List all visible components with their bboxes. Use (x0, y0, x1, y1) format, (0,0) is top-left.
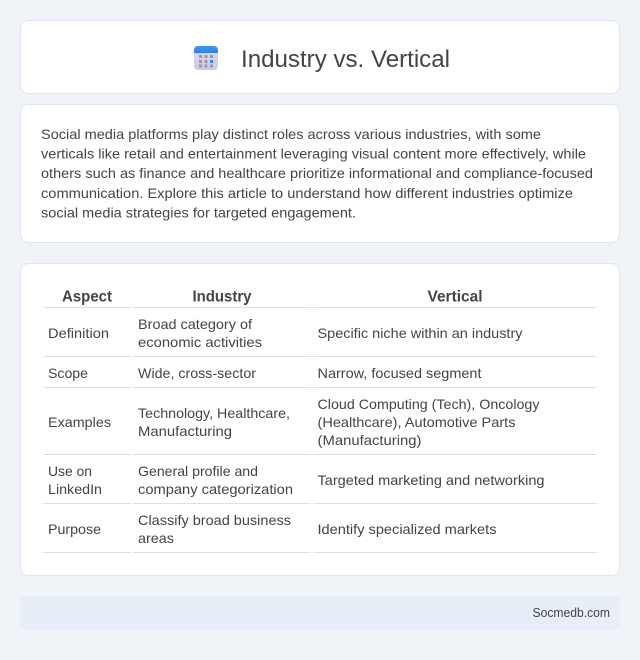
row: examples: Technology, Healthcare, (138, 405, 290, 421)
row: purpose: Classify broad business (138, 512, 291, 528)
table header: Vertical (428, 288, 482, 306)
row: use on LinkedIn: company categorization (138, 481, 293, 497)
panel: introduction (20, 104, 620, 242)
row: purpose: Identify specialized markets (318, 521, 496, 537)
row: use on LinkedIn (48, 463, 544, 497)
table header: Aspect (62, 288, 112, 306)
row: examples (48, 396, 540, 448)
row: examples: Cloud Computing (Tech), Oncology (318, 396, 540, 412)
text block: introduction paragraph: communication. Explore this article to understand how different industries optimize (41, 185, 573, 201)
row: examples: Examples (48, 414, 111, 430)
table header: Industry (192, 288, 252, 306)
row: definition (48, 316, 522, 350)
footer credit: Socmedb.com (532, 606, 610, 620)
row: scope: Wide, cross-sector (138, 365, 256, 381)
row: definition: Definition (48, 325, 109, 341)
title: Industry vs. Vertical (241, 46, 450, 73)
text block: introduction paragraph: others such as finance and healthcare prioritize informational and compliance-focused (41, 165, 593, 181)
row: purpose: areas (138, 530, 174, 546)
footer bar (20, 596, 620, 630)
row: use on LinkedIn: General profile and (138, 463, 258, 479)
row: definition: economic activities (138, 334, 262, 350)
panel: comparison table (20, 264, 620, 576)
row: use on LinkedIn: LinkedIn (48, 481, 102, 497)
row: scope: Scope (48, 365, 88, 381)
icon: calendar (194, 46, 218, 70)
row: purpose (48, 512, 496, 546)
row: definition: Broad category of (138, 316, 252, 332)
panel: title card (20, 20, 620, 94)
row: use on LinkedIn: Targeted marketing and networking (318, 472, 544, 488)
row: examples: Manufacturing (138, 423, 232, 439)
row: purpose: Purpose (48, 521, 101, 537)
row: use on LinkedIn: Use on (48, 463, 92, 479)
row: examples: (Manufacturing) (318, 432, 422, 448)
table header (62, 288, 482, 306)
row: scope: Narrow, focused segment (318, 365, 482, 381)
text block: introduction paragraph (41, 126, 593, 220)
text block: introduction paragraph: verticals like retail and entertainment leveraging visual content more effectively, while (41, 146, 586, 162)
row: scope (48, 365, 482, 381)
row: definition: Specific niche within an industry (318, 325, 522, 341)
text block: introduction paragraph: social media strategies for targeted engagement. (41, 204, 356, 220)
row: examples: (Healthcare), Automotive Parts (318, 414, 516, 430)
text block: introduction paragraph: Social media platforms play distinct roles across various industries, with some (41, 126, 541, 142)
